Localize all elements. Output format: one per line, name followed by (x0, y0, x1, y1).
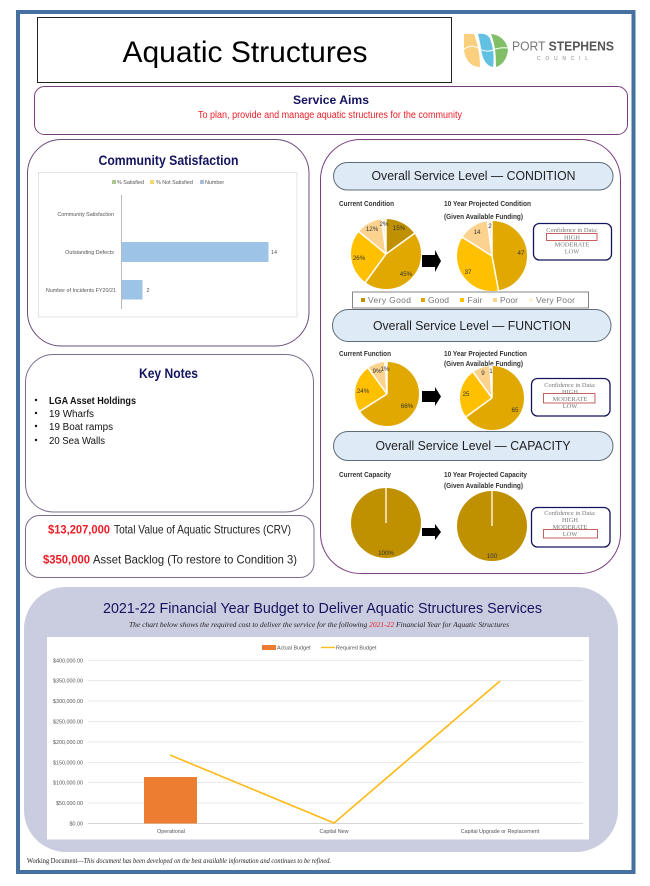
heading: service aims: Service Aims (293, 93, 369, 107)
section: function (332, 310, 611, 417)
pie chart: projected function: 1 (489, 368, 493, 375)
bar chart: community satisfaction: Community Satisfaction (57, 212, 114, 218)
combo chart: budget: $400,000.00 (53, 658, 83, 664)
combo chart: budget: Required Budget (336, 646, 377, 652)
combo chart: budget: Capital Upgrade or Replacement (461, 829, 540, 835)
text: budget description: The chart below shows the required cost to deliver the service for the following 2021-22 Financial Year for Aquatic Structures (129, 620, 509, 629)
list: asset holdings: 20 Sea Walls (49, 436, 105, 447)
pie chart: current condition: 15% (393, 225, 406, 232)
pie chart: projected condition: 14 (474, 229, 481, 236)
list: asset holdings: LGA Asset Holdings (49, 396, 136, 407)
confidence box: condition, high: MODERATE (555, 242, 589, 248)
panel: asset values (26, 516, 314, 578)
arrow (422, 387, 441, 406)
confidence box: condition, high: Confidence in Data: (546, 227, 598, 234)
bar chart: community satisfaction: % Not Satisfied (156, 180, 193, 186)
pie chart: current function: 24% (357, 388, 370, 395)
legend: condition ratings (352, 292, 588, 308)
confidence box: function, moderate: MODERATE (553, 396, 587, 403)
combo chart: budget: Actual Budget (277, 646, 311, 652)
bar chart: community satisfaction: % Satisfied (117, 180, 144, 186)
panel: key notes (26, 354, 314, 512)
bar chart: community satisfaction: Number of Incidents FY20/21 (46, 288, 116, 294)
combo chart: budget: $50,000.00 (56, 801, 83, 807)
confidence box: condition, high: HIGH (564, 234, 580, 242)
confidence box: capacity, low (532, 508, 610, 547)
arrow (422, 250, 441, 272)
confidence box: condition, high (534, 224, 612, 260)
confidence box: function, moderate: Confidence in Data: (544, 382, 596, 389)
combo chart: budget: $200,000.00 (53, 740, 83, 746)
legend: condition ratings: Good (428, 295, 449, 305)
pie chart: projected condition: 37 (465, 269, 472, 276)
combo chart: budget: Operational (157, 829, 185, 835)
pie chart: projected capacity: 100 (487, 553, 498, 560)
list: asset holdings: 19 Wharfs (49, 409, 94, 420)
combo chart: budget: $150,000.00 (53, 760, 83, 766)
footer note: Working Document—This document has been developed on the best available information and continues to be refined. (27, 857, 331, 865)
label: current condition: Current Condition (339, 201, 394, 208)
logo: Port Stephens Council: COUNCIL (537, 56, 588, 62)
logo: Port Stephens Council (464, 34, 614, 67)
pie chart: projected function: 65 (512, 407, 519, 414)
label: projected condition: 10 Year Projected Condition (444, 201, 531, 208)
label: projected function: (Given Available Funding) (444, 361, 523, 368)
confidence box: capacity, low: MODERATE (553, 524, 587, 531)
value: asset backlog: Asset Backlog (To restore to Condition 3) (93, 552, 297, 566)
panel: overall service levels (320, 140, 620, 574)
value: asset backlog: $350,000 (43, 552, 90, 566)
heading pill: condition: Overall Service Level — CONDITION (372, 169, 576, 183)
label: projected condition (444, 201, 531, 221)
pie chart: projected condition (462, 220, 525, 291)
combo chart: budget (47, 637, 589, 840)
combo chart: budget: $100,000.00 (53, 780, 83, 786)
value: total value (48, 522, 291, 536)
combo chart: budget: $250,000.00 (53, 720, 83, 726)
confidence box: capacity, low: LOW (563, 531, 578, 538)
value: total value: Total Value of Aquatic Structures (CRV) (114, 522, 291, 536)
pie chart: current capacity (351, 488, 421, 558)
heading pill: capacity (334, 432, 613, 460)
pie chart: current condition: 26% (353, 255, 366, 262)
confidence box: capacity, low: Confidence in Data: (544, 510, 596, 517)
pie chart: current condition: 12% (366, 226, 379, 233)
bar chart: community satisfaction: 14 (271, 250, 277, 256)
combo chart: budget: Capital New (319, 829, 349, 835)
label: projected capacity: 10 Year Projected Capacity (444, 472, 527, 479)
legend: condition ratings: Very Poor (536, 295, 575, 305)
legend: condition ratings: Poor (500, 295, 518, 305)
combo chart: budget: $300,000.00 (53, 699, 83, 705)
bar chart: community satisfaction (38, 172, 297, 317)
label: projected condition: (Given Available Funding) (444, 214, 523, 221)
confidence box: function, moderate: LOW (563, 403, 578, 410)
combo chart: budget: $0.00 (70, 822, 83, 828)
label: projected capacity (444, 472, 527, 490)
pie chart: current condition: 2% (380, 221, 389, 228)
label: current function: Current Function (339, 351, 391, 358)
heading: community satisfaction: Community Satisfaction (98, 152, 238, 168)
label: projected function: 10 Year Projected Function (444, 351, 527, 358)
confidence box: function, moderate (532, 378, 610, 416)
heading pill: condition (334, 162, 613, 190)
section: capacity (334, 432, 613, 561)
legend: condition ratings: Fair (468, 295, 483, 305)
combo chart: budget: $350,000.00 (53, 678, 83, 684)
arrow (422, 524, 441, 540)
panel: service aims (34, 86, 628, 134)
logo: Port Stephens Council: PORT STEPHENS (512, 40, 614, 54)
pie chart: current function: 9% (373, 368, 382, 375)
legend: condition ratings: Very Good (368, 295, 411, 305)
confidence box: function, moderate: HIGH (562, 389, 578, 396)
list: asset holdings: 19 Boat ramps (49, 422, 113, 433)
confidence box: capacity, low: HIGH (562, 517, 578, 524)
section: condition (334, 162, 613, 308)
heading pill: capacity: Overall Service Level — CAPACITY (376, 439, 571, 453)
pie chart: projected condition: 47 (518, 250, 525, 257)
title box: Aquatic Structures (122, 36, 368, 69)
pie chart: current function: 1% (381, 366, 390, 373)
pie chart: current condition (353, 218, 415, 283)
bar chart: community satisfaction: Number (205, 180, 224, 186)
pie chart: current capacity: 100% (378, 550, 394, 557)
title box (38, 18, 452, 82)
label: projected function (444, 351, 527, 368)
pie chart: projected condition: 2 (488, 223, 492, 230)
pie chart: current function (357, 361, 414, 412)
confidence box: condition, high: LOW (565, 248, 580, 256)
text: service aim statement: To plan, provide and manage aquatic structures for the community (198, 110, 462, 121)
bar chart: community satisfaction: 2 (146, 288, 150, 294)
value: total value: $13,207,000 (48, 522, 110, 536)
pie chart: current condition: 45% (400, 271, 413, 278)
heading: key notes: Key Notes (139, 365, 198, 381)
pie chart: projected function: 9 (481, 370, 485, 377)
label: projected capacity: (Given Available Funding) (444, 483, 523, 490)
list: asset holdings (35, 396, 136, 447)
bar chart: community satisfaction: Outstanding Defects (65, 250, 114, 256)
panel: community satisfaction (28, 140, 309, 346)
label: current capacity: Current Capacity (339, 472, 391, 479)
heading pill: function (332, 310, 611, 342)
pie chart: projected capacity (457, 491, 527, 561)
pie chart: projected function (463, 365, 519, 417)
pie chart: projected function: 25 (463, 391, 470, 398)
pie chart: current function: 66% (401, 403, 414, 410)
heading: budget: 2021-22 Financial Year Budget to Deliver Aquatic Structures Services (103, 600, 542, 617)
heading pill: function: Overall Service Level — FUNCTION (373, 319, 571, 333)
panel: budget (24, 587, 618, 852)
